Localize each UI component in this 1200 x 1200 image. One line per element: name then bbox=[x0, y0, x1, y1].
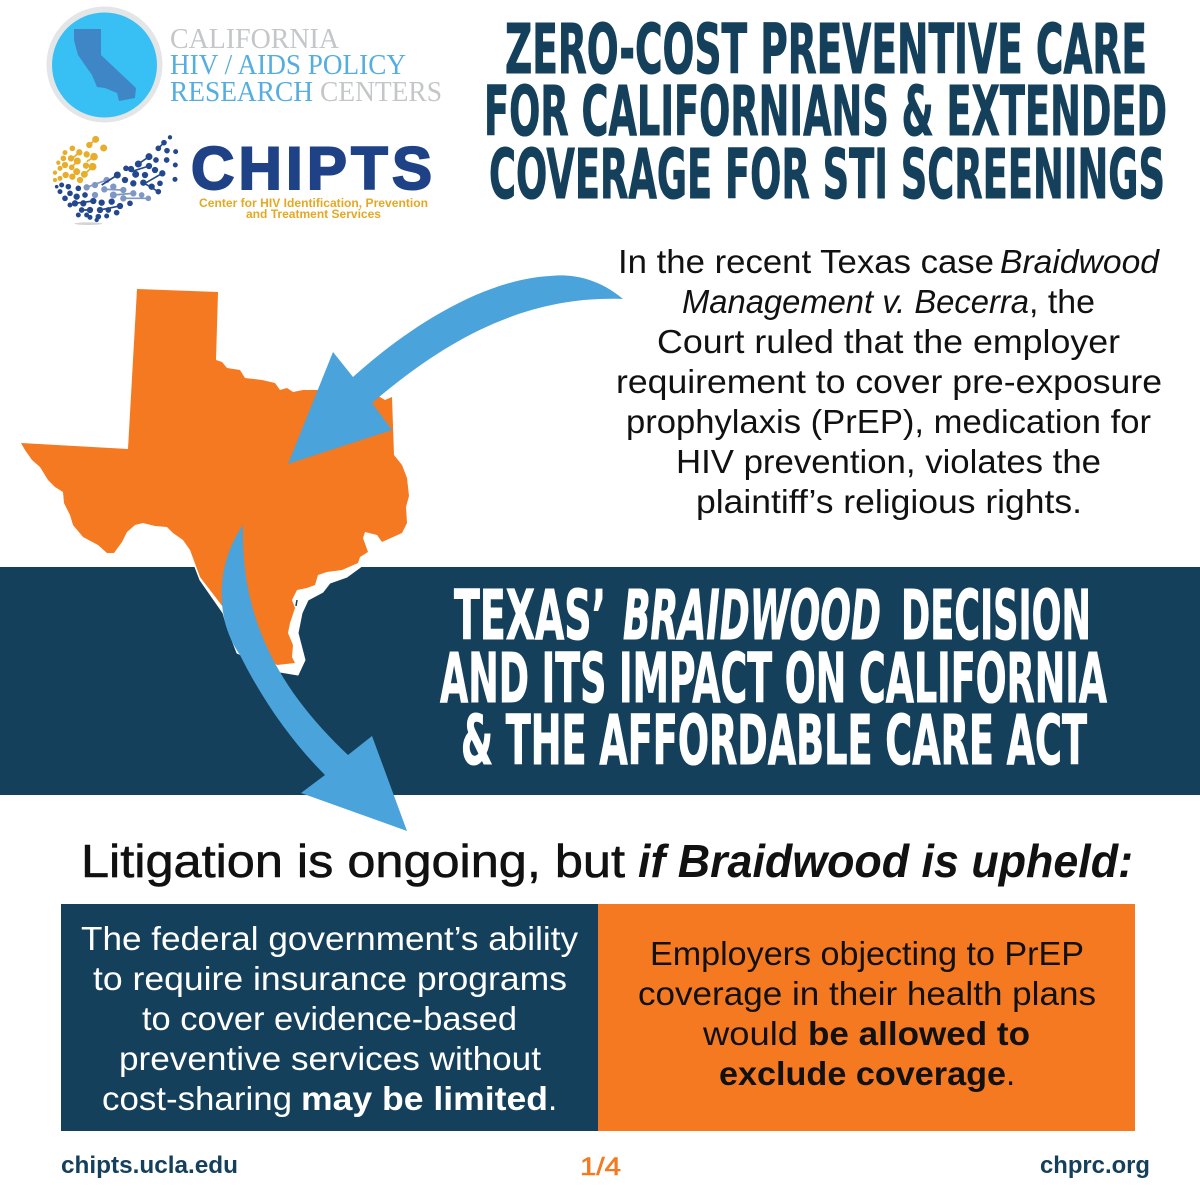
panel: employers outcome: exclude coverage bbox=[719, 1055, 1006, 1092]
panel: federal government outcome: may be limited bbox=[301, 1080, 548, 1117]
logo: California HIV/AIDS Policy Research Centers bbox=[46, 6, 442, 122]
panel: employers outcome: Employers objecting to PrEP bbox=[650, 935, 1084, 972]
panel: employers outcome: coverage in their health plans bbox=[638, 975, 1096, 1012]
panel: federal government outcome: to require insurance programs bbox=[93, 960, 567, 997]
logo: CHIPTS: and Treatment Services bbox=[246, 207, 381, 221]
panel: employers outcome bbox=[598, 904, 1135, 1131]
panel: employers outcome: be allowed to bbox=[808, 1015, 1030, 1052]
panel: employers outcome: . bbox=[1006, 1055, 1015, 1092]
panel: federal government outcome: preventive services without bbox=[119, 1040, 541, 1077]
arrow: from case text into Texas bbox=[288, 275, 623, 464]
panel: navy heading band bbox=[0, 567, 1200, 795]
heading: Texas' Braidwood decision: BRAIDWOOD bbox=[623, 576, 881, 656]
logo: CHIPTS: CHIPTS bbox=[191, 135, 432, 202]
panel: employers outcome: would bbox=[702, 1015, 798, 1052]
logo: California HIV/AIDS Policy Research Centers: CENTERS bbox=[320, 77, 442, 108]
text block: case summary: prophylaxis (PrEP), medication for bbox=[626, 403, 1151, 440]
text block: case summary: requirement to cover pre-exposure bbox=[616, 363, 1162, 400]
arrow: from Texas down to outcomes bbox=[222, 525, 407, 831]
panel: federal government outcome: . bbox=[548, 1080, 557, 1117]
heading: Texas' Braidwood decision bbox=[440, 576, 1107, 781]
text block: case summary bbox=[616, 243, 1162, 520]
panel: federal government outcome: cost-sharing bbox=[102, 1080, 292, 1117]
panel: federal government outcome: The federal government’s ability bbox=[81, 920, 579, 957]
map: Texas bbox=[21, 289, 409, 675]
text block: case summary: , the bbox=[1029, 283, 1095, 320]
panel: federal government outcome: to cover evidence-based bbox=[142, 1000, 517, 1037]
footer: page number: 1/4 bbox=[580, 1153, 621, 1181]
heading: Texas' Braidwood decision: TEXAS’ bbox=[454, 576, 606, 656]
panel: federal government outcome bbox=[61, 904, 598, 1131]
text block: case summary: plaintiff’s religious rights. bbox=[696, 483, 1082, 520]
logo: CHIPTS bbox=[53, 135, 432, 225]
text block: case summary: Court ruled that the employer bbox=[657, 323, 1120, 360]
text block: case summary: Management v. Becerra bbox=[682, 283, 1029, 320]
logo: California HIV/AIDS Policy Research Centers: HIV / AIDS POLICY bbox=[170, 50, 406, 81]
title bbox=[484, 10, 1167, 215]
text block: case summary: Braidwood bbox=[1000, 243, 1161, 280]
logo: California HIV/AIDS Policy Research Centers: CALIFORNIA bbox=[170, 24, 340, 55]
logo: CHIPTS: Center for HIV Identification, Prevention bbox=[199, 196, 428, 210]
subheading: litigation is ongoing: Litigation is ongoing, but bbox=[81, 835, 625, 887]
footer: CHIPTS url: chipts.ucla.edu bbox=[61, 1152, 238, 1179]
text block: case summary: HIV prevention, violates the bbox=[676, 443, 1101, 480]
logo: California HIV/AIDS Policy Research Centers: RESEARCH bbox=[170, 77, 313, 108]
footer: CHPRC url: chprc.org bbox=[1040, 1152, 1150, 1179]
subheading: litigation is ongoing bbox=[81, 835, 1133, 887]
subheading: litigation is ongoing: if Braidwood is upheld: bbox=[638, 835, 1133, 887]
icon: CHIPTS dotted globe bbox=[53, 136, 178, 225]
text block: case summary: In the recent Texas case bbox=[618, 243, 994, 280]
